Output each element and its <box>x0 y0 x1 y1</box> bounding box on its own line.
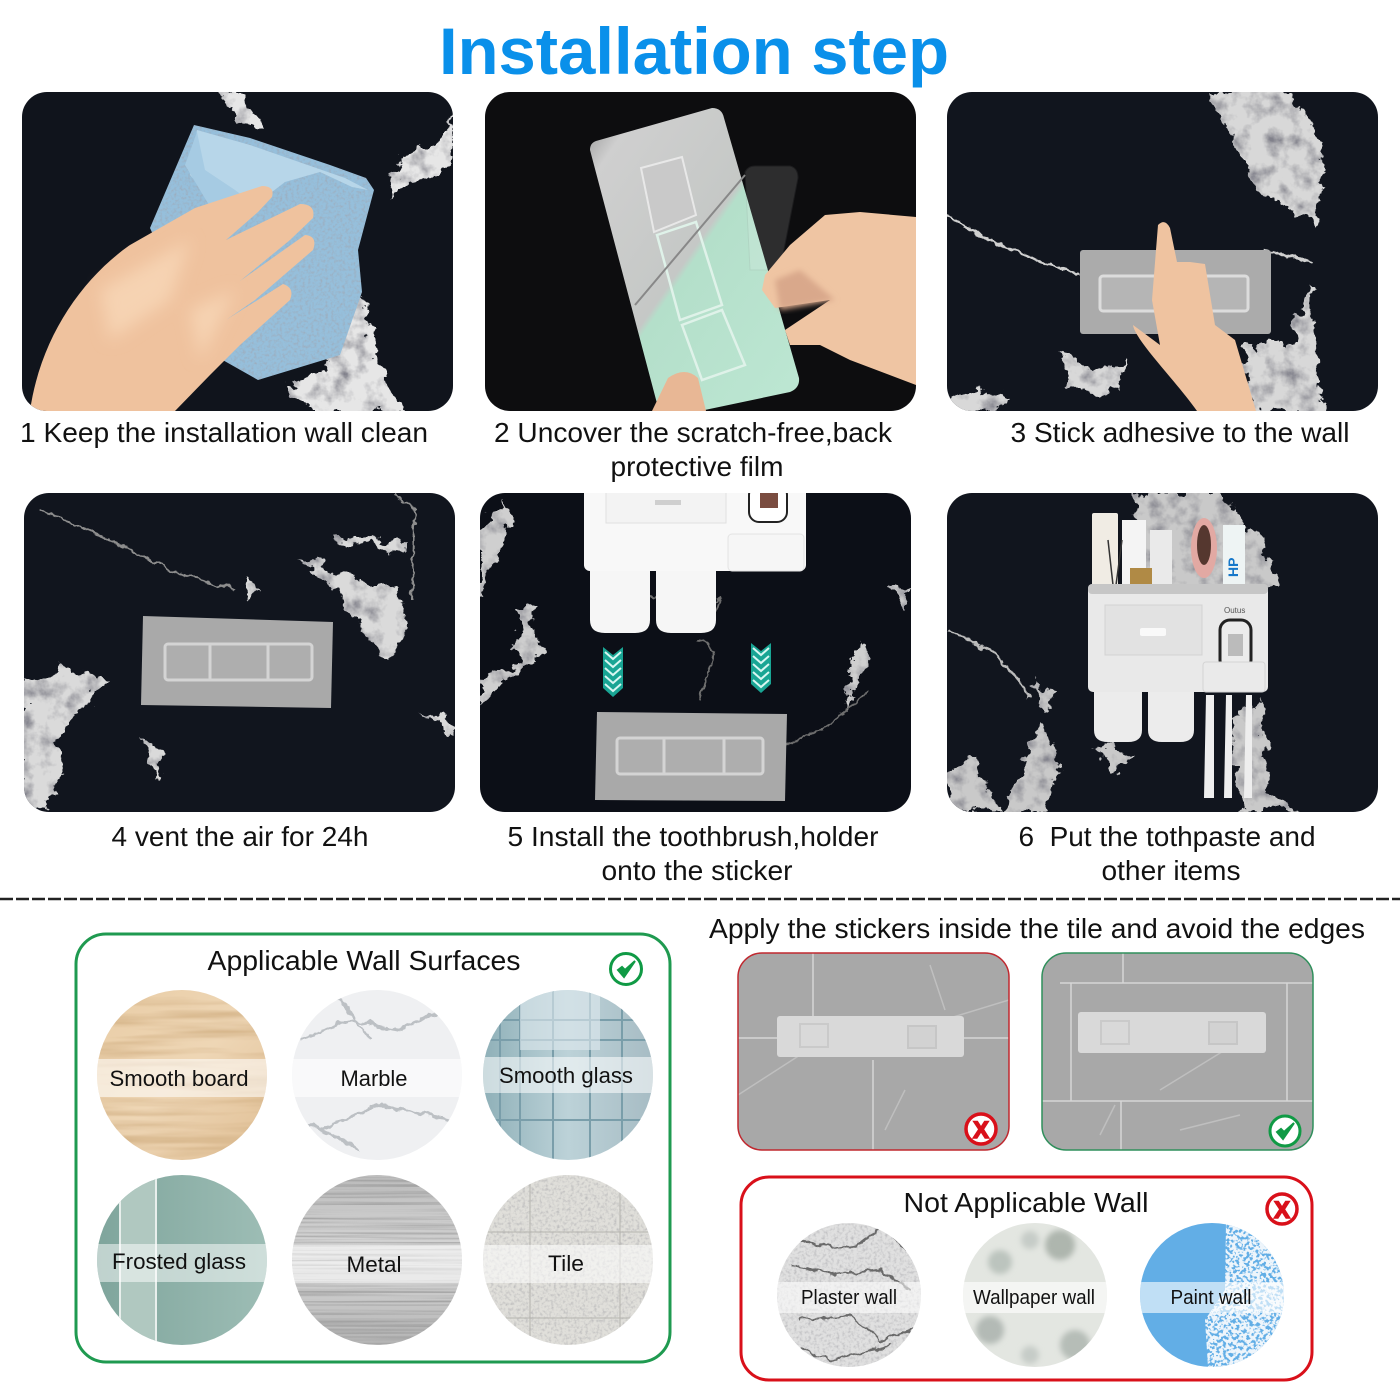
hand <box>30 186 314 411</box>
caption step 2: protective film <box>610 451 784 482</box>
icon: green check <box>610 954 642 984</box>
surface: tile <box>483 1175 653 1345</box>
panel: applicable wall surfaces <box>76 934 670 1362</box>
surface: wallpaper wall: Wallpaper wall <box>973 1287 1095 1309</box>
surface: smooth board: Smooth board <box>110 1066 248 1091</box>
panel: step 2 photo <box>485 92 916 411</box>
arrow chevrons left <box>603 647 623 697</box>
product: wall holder: Outus <box>1224 606 1245 615</box>
panel: step 5 photo <box>480 485 911 812</box>
surface: plaster wall <box>777 1223 921 1367</box>
icon: red x heading: X <box>1274 1197 1290 1224</box>
caption step 6 <box>1018 821 1316 886</box>
caption step 2 <box>494 417 893 482</box>
product: wall holder: HP <box>1225 558 1241 577</box>
icon: red x heading <box>1267 1194 1297 1224</box>
arrow chevrons right <box>751 643 771 693</box>
heading: not applicable: Not Applicable Wall <box>904 1187 1148 1218</box>
heading: applicable: Applicable Wall Surfaces <box>208 945 520 976</box>
icon: red x: X <box>973 1117 989 1144</box>
product: wall holder <box>1088 513 1268 798</box>
surface: frosted glass: Frosted glass <box>112 1249 246 1274</box>
surface: metal: Metal <box>346 1252 402 1277</box>
surface: metal <box>292 1175 462 1345</box>
surface: wallpaper wall <box>963 1223 1107 1367</box>
caption step 6: other items <box>1102 855 1240 886</box>
panel: step 4 photo <box>24 493 455 812</box>
panel: wrong tile placement <box>738 953 1009 1150</box>
surface: smooth glass: Smooth glass <box>499 1063 633 1088</box>
surface: paint wall <box>1140 1223 1284 1367</box>
surface: marble: Marble <box>340 1066 408 1091</box>
surface: marble <box>292 990 462 1160</box>
panel: step 3 photo <box>947 92 1378 411</box>
caption step 6: 6 Put the tothpaste and <box>1018 821 1316 852</box>
caption step 2: 2 Uncover the scratch-free,back <box>494 417 893 448</box>
surface: smooth glass <box>483 990 653 1160</box>
icon: green check on tile <box>1270 1116 1300 1146</box>
surface: smooth board <box>97 990 267 1160</box>
caption step 4: 4 vent the air for 24h <box>112 821 368 852</box>
surface: frosted glass <box>97 1175 267 1345</box>
caption step 5 <box>508 821 878 886</box>
panel: correct tile placement <box>1042 953 1313 1150</box>
caption step 3: 3 Stick adhesive to the wall <box>1010 417 1350 448</box>
caption step 5: onto the sticker <box>602 855 792 886</box>
caption step 5: 5 Install the toothbrush,holder <box>508 821 878 852</box>
surface: paint wall: Paint wall <box>1170 1287 1252 1309</box>
surface: plaster wall: Plaster wall <box>801 1287 897 1309</box>
panel: not applicable wall <box>741 1177 1312 1380</box>
heading: sticker advice: Apply the stickers inside the tile and avoid the edges <box>709 913 1365 944</box>
dispenser <box>584 485 806 633</box>
title: Installation step <box>439 14 949 88</box>
caption step 1: 1 Keep the installation wall clean <box>20 417 428 448</box>
panel: step 6 photo <box>947 493 1378 812</box>
towel <box>150 125 374 380</box>
icon: red x <box>966 1114 996 1144</box>
panel: step 1 photo <box>22 92 453 411</box>
surface: tile: Tile <box>548 1251 584 1276</box>
